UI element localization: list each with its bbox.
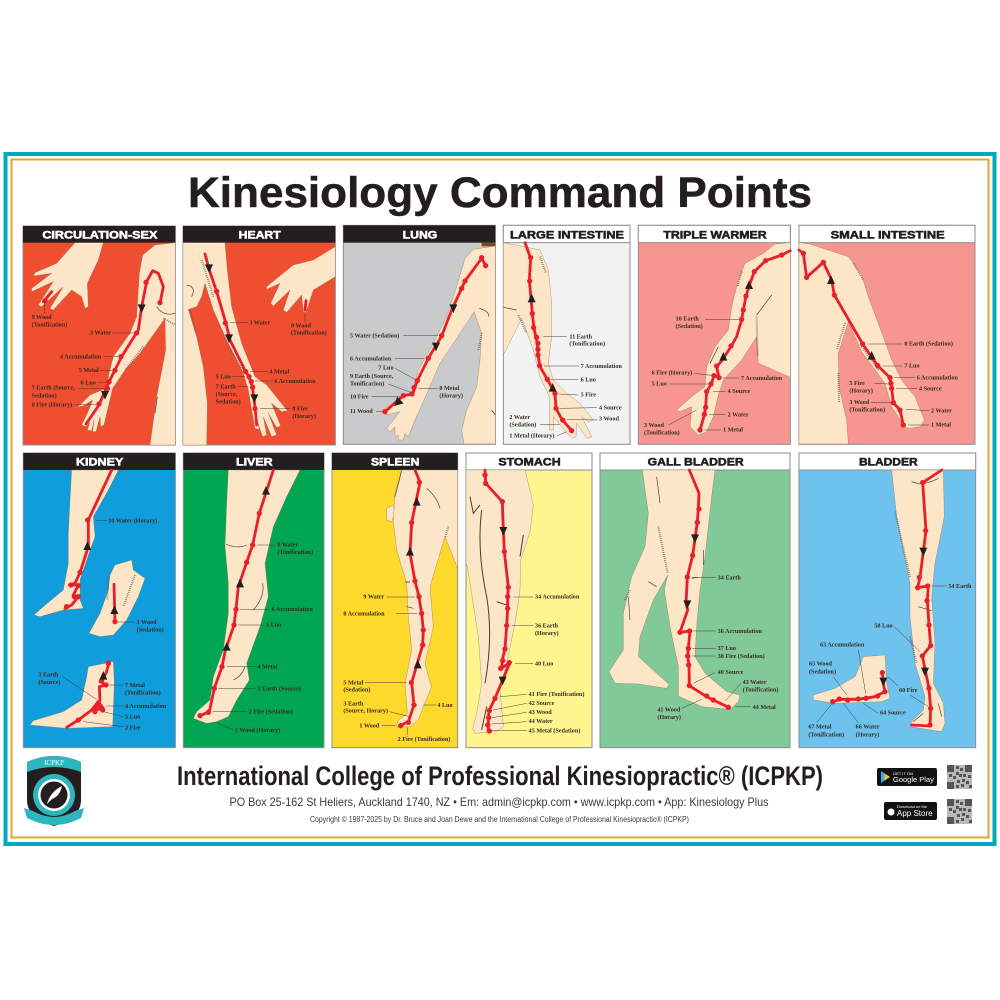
- point labels: 1 Wood: [137, 620, 157, 626]
- point labels: 6 Luo: [581, 377, 596, 383]
- panel: liver: [183, 453, 324, 748]
- meridian line: [525, 243, 572, 431]
- point labels: (Tonification): [125, 690, 161, 697]
- point labels: 3 Wood: [644, 423, 664, 429]
- point labels: (Tonification): [569, 341, 605, 348]
- point labels: 9 Wood: [291, 323, 311, 329]
- meridian line: [485, 470, 510, 731]
- point labels: (Source): [38, 679, 60, 686]
- point labels: 9 Water: [363, 595, 385, 601]
- footer contact line: PO Box 25-162 St Heliers, Auckland 1740, NZ • Em: admin@icpkp.com • www.icpkp.com • App: Kinesiology Plus: [230, 795, 768, 809]
- point labels: 1 Metal: [723, 428, 743, 434]
- point labels: 2 Fire (Sedation): [249, 709, 293, 716]
- point labels: 10 Fire: [350, 394, 369, 400]
- point labels: [350, 332, 463, 415]
- header: large intestine: LARGE INTESTINE: [510, 229, 624, 241]
- illustration: legs: [466, 470, 533, 733]
- point labels: 5 Luo: [125, 715, 140, 721]
- meridian line: [65, 470, 118, 727]
- point labels: 4 Source: [919, 387, 942, 393]
- point labels: 6 Accumulation: [274, 379, 316, 385]
- point labels: (Source, Horary): [343, 708, 388, 715]
- point labels: 7 Metal: [125, 683, 145, 689]
- point labels: [808, 584, 972, 739]
- panel: heart: [183, 226, 335, 445]
- panel: stomach: [466, 453, 592, 748]
- point labels: 7 Accumulation: [581, 364, 622, 370]
- point labels: 60 Fire: [899, 688, 918, 694]
- point labels: 9 Wood: [32, 315, 52, 321]
- point labels: [492, 595, 584, 734]
- point labels: 2 Water: [931, 408, 952, 414]
- title: Kinesiology Command Points: [188, 169, 812, 217]
- point labels: 6 Luo: [81, 380, 96, 386]
- point labels: [509, 334, 622, 440]
- panel: gall bladder: [600, 453, 790, 748]
- point labels: 63 Accumulation: [820, 643, 865, 649]
- point labels: 5 Luo: [652, 382, 667, 388]
- footer organisation name: International College of Professional Kinesiopractic® (ICPKP): [177, 761, 823, 791]
- panel: triple warmer: [638, 225, 790, 444]
- point labels: 6 Fire (Horary): [652, 369, 692, 376]
- point labels: 6 Accumulation: [917, 376, 958, 382]
- point labels: (Tonification): [808, 732, 844, 739]
- point labels: 11 Wood: [350, 409, 373, 415]
- meridian line: [400, 470, 423, 726]
- point labels: 2 Fire: [125, 725, 141, 731]
- point labels: 34 Earth: [718, 575, 741, 581]
- point labels: 1 Metal (Horary): [509, 433, 554, 440]
- point labels: [849, 341, 958, 429]
- point labels: 11 Earth: [569, 334, 593, 340]
- point labels: 8 Accumulation: [343, 611, 385, 617]
- meridian line: [43, 271, 163, 424]
- point labels: 40 Source: [718, 670, 744, 676]
- point labels: 5 Metal: [343, 680, 364, 686]
- point labels: 64 Source: [880, 710, 906, 716]
- badge: Google Play: Google Play: [893, 775, 934, 784]
- header: kidney: KIDNEY: [76, 457, 123, 469]
- point labels: 38 Fire (Sedation): [718, 653, 765, 660]
- point labels: 7 Luo: [378, 365, 394, 371]
- header: lung: LUNG: [403, 229, 437, 241]
- point labels: 6 Accumulation: [350, 357, 392, 363]
- point labels: 4 Source: [728, 389, 751, 395]
- QR code: App Store: [947, 799, 972, 824]
- point labels: 4 Accumulation: [60, 354, 102, 360]
- point labels: 37 Luo: [718, 646, 736, 652]
- header: lung: [343, 225, 495, 243]
- point labels: 5 Metal: [79, 368, 99, 374]
- point labels: (Tonification): [277, 549, 313, 556]
- illustration: arm: [677, 243, 790, 435]
- illustration: arm and torso: [385, 243, 495, 444]
- point labels: [644, 317, 783, 436]
- point labels: 2 Water: [509, 415, 531, 421]
- header: large intestine: [503, 225, 630, 243]
- QR code: Google Play: [947, 765, 972, 789]
- point labels: [213, 543, 313, 734]
- point labels: 42 Source: [529, 701, 555, 707]
- point labels: [38, 517, 167, 731]
- point labels: 3 Earth: [343, 701, 364, 707]
- point labels: [343, 595, 453, 743]
- point labels: 3 Water: [90, 330, 111, 336]
- point labels: (Tonification): [743, 686, 778, 693]
- header: kidney: [23, 453, 175, 470]
- point labels: 1 Wood: [359, 723, 380, 729]
- header: triple warmer: [638, 225, 790, 243]
- point labels: 8 Fire: [292, 407, 308, 413]
- header: spleen: [332, 453, 458, 470]
- panel: small intestine: [799, 225, 975, 444]
- header: small intestine: [799, 225, 975, 243]
- header: gall bladder: [600, 453, 790, 470]
- point labels: (Horary): [439, 392, 463, 399]
- panel: kidney: [23, 453, 175, 748]
- point labels: 43 Water: [743, 680, 767, 686]
- point labels: 7 Earth: [216, 385, 236, 391]
- point labels: (Source,: [216, 391, 238, 398]
- point labels: 41 Fire (Tonification): [529, 691, 584, 698]
- header: circulation-sex: CIRCULATION-SEX: [42, 229, 158, 241]
- meridian line: [799, 250, 903, 425]
- point labels: 8 Water: [277, 543, 299, 549]
- point labels: 3 Wood: [599, 417, 619, 423]
- point labels: 44 Water: [529, 719, 553, 725]
- point labels: 58 Luo: [874, 624, 893, 630]
- illustration: arm: [503, 243, 593, 438]
- header: liver: [183, 453, 324, 470]
- illustration: hand and arm: [32, 243, 175, 445]
- point labels: 5 Luo: [216, 375, 231, 381]
- point labels: 10 Earth: [676, 317, 699, 323]
- header: circulation-sex: [23, 226, 175, 243]
- meridian line: [385, 258, 486, 412]
- point labels: 7 Accumulation: [741, 376, 783, 382]
- footer copyright: Copyright © 1987-2025 by Dr. Bruce and Joan Dewe and the International College of Professional Kinesiopractic® (ICPKP): [310, 815, 689, 824]
- point labels: (Tonification): [849, 406, 885, 413]
- point labels: 3 Water: [249, 320, 271, 326]
- badge: App Store: App Store: [897, 809, 933, 818]
- illustration: leg and foot: [813, 470, 945, 732]
- header: triple warmer: TRIPLE WARMER: [663, 229, 767, 241]
- header: stomach: STOMACH: [498, 457, 561, 469]
- inner gold frame: [12, 160, 988, 838]
- point labels: Tonificacion): [350, 381, 384, 388]
- point labels: 34 Accumulation: [535, 595, 580, 601]
- point labels: (Horary): [292, 413, 316, 420]
- point labels: 4 Accumulation: [125, 704, 167, 710]
- point labels: 4 Source: [599, 405, 622, 411]
- point labels: (Horary): [657, 714, 681, 721]
- point labels: 6 Accumulation: [272, 607, 313, 613]
- header: bladder: [799, 453, 976, 470]
- badge: App Store: Download on the: [897, 804, 928, 809]
- point labels: 36 Earth: [535, 623, 559, 629]
- panel: bladder: [799, 453, 976, 748]
- header: small intestine: SMALL INTESTINE: [831, 229, 945, 241]
- header: stomach: [466, 453, 592, 470]
- panel: spleen: [332, 453, 458, 748]
- point labels: 7 Earth (Source,: [32, 384, 75, 391]
- badge: Google Play: [877, 768, 937, 786]
- illustration: leg and feet: [30, 470, 145, 728]
- point labels: 36 Accumulation: [718, 629, 763, 635]
- header: gall bladder: GALL BLADDER: [648, 457, 744, 469]
- point labels: 5 Luo: [266, 623, 281, 629]
- point labels: (Sedation): [809, 668, 836, 675]
- header: liver: LIVER: [236, 457, 273, 469]
- point labels: 5 Fire: [581, 392, 596, 398]
- point labels: 3 Earth (Source): [257, 685, 301, 692]
- point labels: [216, 313, 327, 420]
- point labels: 8 Fire (Horary): [32, 402, 72, 409]
- panel: lung: [343, 225, 495, 444]
- point labels: 8 Earth (Sedation): [904, 341, 953, 348]
- point labels: 3 Wood: [849, 400, 870, 406]
- header: heart: HEART: [239, 229, 281, 241]
- point labels: 41 Wood: [657, 708, 681, 714]
- point labels: (Sedation): [137, 627, 164, 634]
- illustration: legs: [609, 470, 740, 709]
- point labels: 3 Earth: [38, 673, 59, 679]
- illustration: arm and hand: [183, 243, 335, 445]
- point labels: 9 Earth (Source,: [350, 373, 394, 380]
- illustration: leg: [387, 470, 458, 727]
- point labels: (Horary): [849, 387, 873, 394]
- point labels: Sedation): [216, 398, 241, 405]
- point labels: Sedation): [32, 392, 57, 399]
- panel: circulation-sex: [23, 226, 175, 445]
- point labels: 7 Luo: [904, 364, 920, 370]
- point labels: 10 Water (Horary): [108, 517, 157, 524]
- illustration: leg: [193, 470, 300, 723]
- meridian line: [680, 470, 728, 707]
- header: bladder: BLADDER: [859, 457, 918, 469]
- point labels: 4 Metal: [257, 664, 278, 670]
- point labels: 8 Metal: [439, 386, 460, 392]
- point labels: 66 Water: [856, 724, 880, 730]
- logo: ICPKP crest: ICPKP: [44, 759, 64, 767]
- point labels: [32, 302, 135, 409]
- point labels: (Sedation): [343, 687, 370, 694]
- meridian line: [205, 254, 306, 425]
- meridian line: [700, 251, 790, 430]
- point labels: 45 Metal (Sedation): [529, 727, 580, 734]
- point labels: (Tonification): [291, 330, 327, 337]
- point labels: (Sedation): [676, 323, 703, 330]
- point labels: 67 Metal: [808, 724, 832, 730]
- point labels: 4 Luo: [437, 703, 453, 709]
- point labels: 54 Earth: [948, 584, 972, 590]
- point labels: 1 Metal: [931, 423, 951, 429]
- point labels: 1 Wood (Horary): [235, 727, 280, 734]
- panel: large intestine: [503, 225, 630, 444]
- point labels: 40 Luo: [535, 661, 553, 667]
- point labels: 2 Fire (Tonification): [398, 736, 450, 743]
- point labels: 5 Fire: [849, 381, 865, 387]
- point labels: 4 Metal: [269, 369, 290, 375]
- point labels: (Sedation): [509, 421, 536, 428]
- point labels: [657, 575, 778, 721]
- header: heart: [183, 226, 335, 243]
- point labels: 2 Water: [728, 412, 749, 418]
- point labels: (Tonification): [644, 429, 680, 436]
- illustration: arm and torso: [799, 243, 924, 444]
- logo: ICPKP crest: [24, 756, 84, 826]
- header: spleen: SPLEEN: [371, 457, 419, 469]
- badge: Google Play: GET IT ON: [893, 771, 913, 776]
- point labels: 5 Water (Sedation): [350, 332, 399, 339]
- point labels: 43 Wood: [529, 710, 552, 716]
- point labels: (Tonification): [32, 321, 67, 328]
- outer teal frame: [6, 154, 994, 844]
- point labels: (Horary): [535, 630, 559, 637]
- meridian line: [200, 470, 273, 716]
- point labels: 65 Wood: [809, 661, 833, 667]
- point labels: 44 Metal: [753, 705, 776, 711]
- meridian line: [833, 470, 942, 726]
- point labels: (Horary): [856, 732, 879, 739]
- badge: App Store: [884, 802, 937, 820]
